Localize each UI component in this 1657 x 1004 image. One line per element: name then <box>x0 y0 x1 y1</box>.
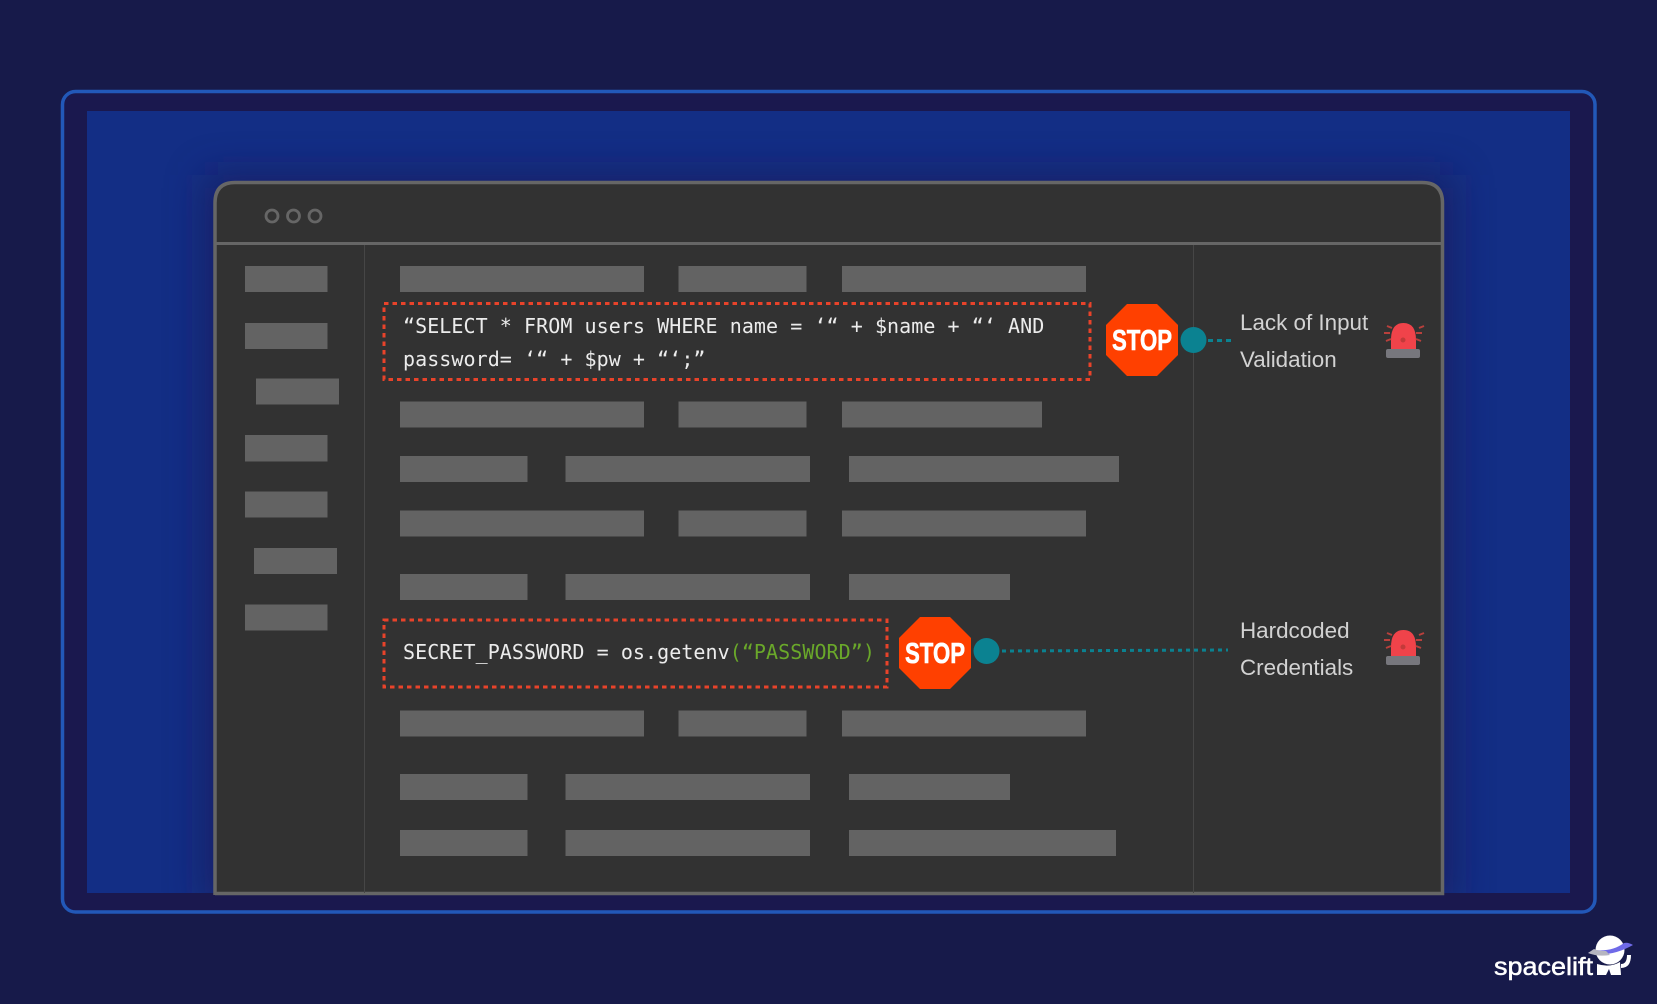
callout: hardcoded password code block: SECRET_PASSWORD = os.getenv(“PASSWORD”) <box>403 640 875 664</box>
connector 1: teal dot and dotted line <box>1180 327 1233 353</box>
window drop shadow <box>205 175 1453 905</box>
icon: stop sign 1: STOP <box>1112 325 1172 357</box>
label: hardcoded credentials <box>1240 618 1353 680</box>
logo: spacelift: spacelift <box>1494 953 1593 981</box>
title bar divider <box>215 242 1442 245</box>
icon: stop sign 2: STOP <box>905 638 965 670</box>
callout: SQL query code block: “SELECT * FROM users WHERE name = ‘“ + $name + “‘ AND <box>403 314 1044 338</box>
label: lack of input validation: Validation <box>1240 347 1337 372</box>
icon: alarm siren 2 <box>1384 630 1424 665</box>
label: lack of input validation: Lack of Input <box>1240 310 1369 335</box>
label: lack of input validation <box>1240 310 1369 372</box>
icon: alarm siren 1 <box>1384 323 1424 358</box>
logo: spacelift <box>1494 936 1633 981</box>
callout: hardcoded password code block <box>384 620 887 687</box>
code placeholder row 4 <box>400 510 1086 536</box>
code placeholder row 6 <box>400 710 1086 736</box>
code placeholder row 7 <box>400 774 1010 800</box>
connector 2: teal dot and dotted line <box>974 638 1228 664</box>
code placeholder row 1 <box>400 266 1086 292</box>
sidebar placeholder bars <box>245 266 339 630</box>
icon: stop sign 2 <box>899 617 971 689</box>
blue backdrop panel <box>87 111 1570 893</box>
panel: code editor window <box>215 182 1442 895</box>
window control dots <box>266 210 321 222</box>
outer rounded frame <box>62 92 1595 912</box>
code placeholder row 5 <box>400 574 1010 600</box>
label: hardcoded credentials: Hardcoded <box>1240 618 1350 643</box>
sidebar and annotations column dividers <box>364 245 1194 893</box>
icon: stop sign 1 <box>1106 304 1178 376</box>
code placeholder row 8 <box>400 830 1116 856</box>
callout: SQL query code block: password= ‘“ + $pw + “‘;” <box>403 347 706 371</box>
code placeholder row 2 <box>400 402 1042 428</box>
callout: SQL query code block <box>384 304 1090 380</box>
code placeholder row 3 <box>400 456 1119 482</box>
label: hardcoded credentials: Credentials <box>1240 655 1353 680</box>
